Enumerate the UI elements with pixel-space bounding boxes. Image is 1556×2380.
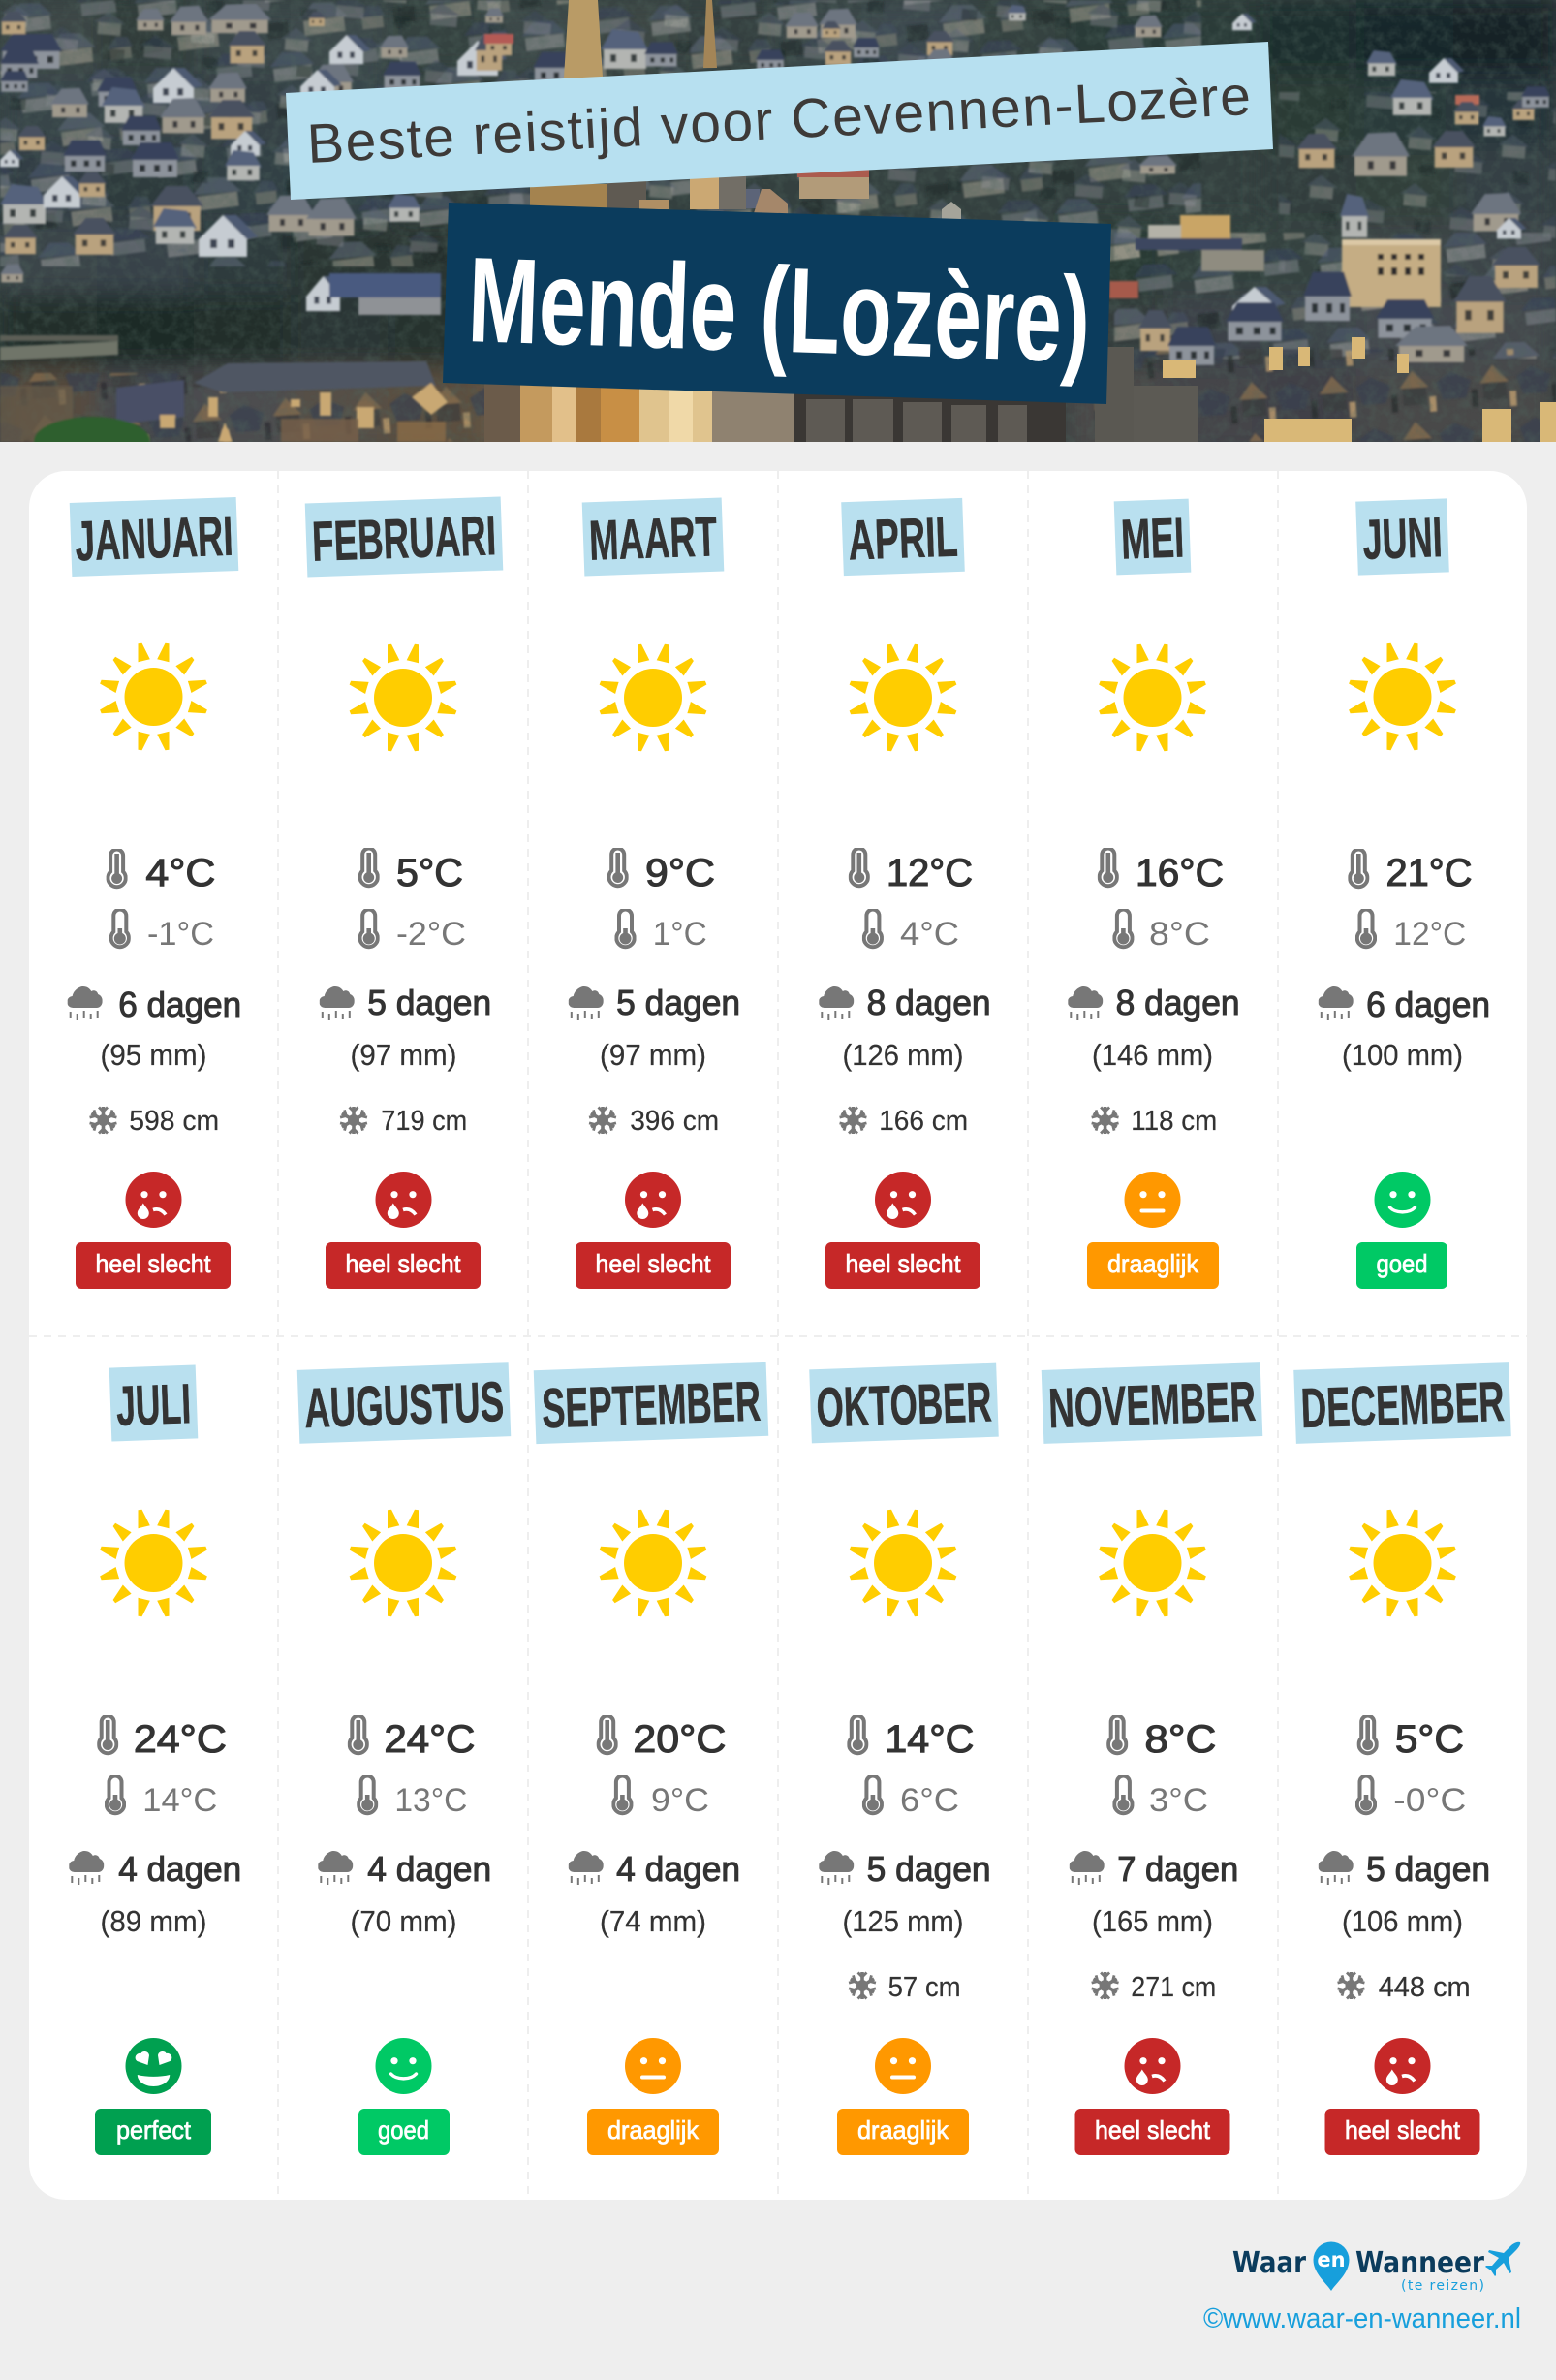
rating face (1124, 1172, 1180, 1228)
rating badge (587, 2109, 719, 2155)
icon: airplane (1485, 2242, 1520, 2276)
rain days: 4 dagen (367, 1849, 491, 1889)
high temperature (849, 1715, 974, 1761)
rating badge (76, 1242, 231, 1289)
low temperature (864, 909, 959, 953)
low temperature: 1°C (653, 916, 707, 953)
panel: april (819, 498, 991, 1289)
month label (582, 498, 724, 576)
month label: SEPTEMBER (541, 1370, 762, 1440)
rating badge (1087, 1242, 1219, 1289)
low temperature: 6°C (900, 1782, 959, 1819)
rating badge (825, 1242, 980, 1289)
panel: mei (1068, 499, 1240, 1289)
snow: 57 cm (888, 1972, 961, 2003)
rain days: 6 dagen (118, 985, 241, 1024)
precipitation: (165 mm) (1092, 1904, 1213, 1938)
low temperature (107, 1775, 217, 1819)
rating badge: heel slecht (345, 1249, 461, 1278)
panel: juli (69, 1364, 241, 2155)
high temperature: 5°C (1395, 1718, 1464, 1761)
rating badge: goed (378, 2115, 429, 2145)
high temperature: 24°C (384, 1718, 475, 1761)
rating badge: draaglijk (857, 2115, 949, 2145)
month label (109, 1364, 198, 1442)
snow: 271 cm (1131, 1972, 1216, 2003)
rating badge (95, 2109, 211, 2155)
rain days (1069, 1849, 1238, 1889)
snow (340, 1106, 467, 1137)
low temperature (613, 1775, 709, 1819)
precipitation: (126 mm) (843, 1038, 963, 1072)
panel: augustus (297, 1362, 511, 2155)
rating face (376, 1172, 432, 1228)
rating badge: heel slecht (95, 1249, 211, 1278)
rating badge: draaglijk (1107, 1249, 1199, 1278)
icon: sun (1099, 644, 1206, 751)
rain days: 4 dagen (118, 1849, 241, 1889)
rating badge: heel slecht (845, 1249, 961, 1278)
title banner (286, 42, 1273, 200)
low temperature: 12°C (1393, 916, 1466, 953)
icon: sun (849, 1510, 957, 1616)
high temperature: 24°C (134, 1718, 227, 1761)
rain days: 4 dagen (616, 1849, 740, 1889)
panel: december (1293, 1362, 1511, 2155)
high temperature (350, 1715, 475, 1761)
high temperature: 20°C (633, 1718, 726, 1761)
rating face (1124, 2038, 1180, 2094)
low temperature: 4°C (900, 916, 959, 953)
rating face (126, 1172, 182, 1228)
low temperature (360, 909, 466, 953)
low temperature (1114, 1775, 1208, 1819)
panel: maart (568, 498, 740, 1289)
logo: Waar en Wanneer: Wanneer (1355, 2246, 1484, 2280)
snow: 396 cm (630, 1106, 719, 1137)
rain days: 6 dagen (1366, 985, 1490, 1024)
precipitation: (146 mm) (1092, 1038, 1213, 1072)
logo: Waar en Wanneer: (te reizen) (1401, 2278, 1484, 2294)
month label (1114, 499, 1191, 575)
rating badge: heel slecht (1345, 2115, 1461, 2145)
logo: Waar en Wanneer: Waar (1232, 2246, 1306, 2280)
month label (534, 1362, 768, 1444)
month label (1355, 498, 1449, 576)
month label: JUNI (1361, 506, 1444, 572)
precipitation: (95 mm) (101, 1038, 207, 1072)
website url: ©www.waar-en-wanneer.nl (1203, 2303, 1521, 2334)
city banner (443, 203, 1111, 404)
high temperature (599, 1715, 726, 1761)
snow (1091, 1106, 1217, 1137)
month label: FEBRUARI (311, 504, 497, 574)
snow (1091, 1972, 1216, 2003)
rating face (875, 1172, 931, 1228)
snow: 166 cm (879, 1106, 968, 1137)
month label: OKTOBER (815, 1370, 993, 1440)
high temperature (108, 849, 215, 894)
month label (809, 1363, 999, 1443)
rating badge (1356, 1242, 1447, 1289)
rating face (625, 2038, 681, 2094)
low temperature: -0°C (1393, 1782, 1466, 1819)
month label: MEI (1120, 506, 1185, 572)
panel: september (534, 1362, 768, 2155)
month label (305, 496, 503, 578)
month label: AUGUSTUS (303, 1370, 505, 1440)
high temperature: 9°C (645, 852, 715, 894)
high temperature (1100, 849, 1224, 894)
snow: 448 cm (1379, 1972, 1471, 2003)
icon: sun (100, 1510, 207, 1616)
low temperature: 3°C (1149, 1782, 1208, 1819)
low temperature: -2°C (396, 916, 466, 953)
icon: sun (349, 1510, 457, 1616)
rain days: 5 dagen (1366, 1849, 1490, 1889)
precipitation: (125 mm) (843, 1904, 963, 1938)
high temperature (1350, 849, 1473, 894)
low temperature (358, 1775, 467, 1819)
panel: februari (305, 496, 503, 1289)
precipitation: (70 mm) (351, 1904, 457, 1938)
month label: NOVEMBER (1047, 1370, 1257, 1440)
precipitation: (74 mm) (600, 1904, 706, 1938)
rain days (67, 985, 241, 1024)
city banner: Mende (Lozère) (466, 233, 1092, 388)
icon: sun (349, 644, 457, 751)
rating face (1374, 1172, 1430, 1228)
rating badge: draaglijk (607, 2115, 700, 2145)
icon: location pin (1314, 2242, 1349, 2291)
calendar card (29, 471, 1527, 2200)
rain days (69, 1849, 241, 1889)
icon: sun (1349, 643, 1456, 750)
low temperature: 14°C (142, 1782, 217, 1819)
rating badge (358, 2109, 450, 2155)
month label (841, 498, 965, 576)
low temperature: 9°C (651, 1782, 709, 1819)
rating badge (576, 1242, 731, 1289)
icon: location pin: en (1317, 2248, 1346, 2271)
rating badge (837, 2109, 969, 2155)
high temperature: 4°C (145, 852, 215, 894)
panel: oktober (809, 1363, 999, 2155)
low temperature: -1°C (147, 916, 214, 953)
icon: sun (1349, 1510, 1456, 1616)
low temperature (616, 909, 707, 953)
high temperature (1108, 1715, 1216, 1761)
high temperature (99, 1715, 227, 1761)
rain days: 8 dagen (1116, 983, 1240, 1022)
icon: sun (1099, 1510, 1206, 1616)
rating badge: goed (1376, 1249, 1428, 1278)
month label (297, 1362, 511, 1444)
low temperature (864, 1775, 959, 1819)
high temperature (608, 849, 715, 894)
hero photo of Mende (0, 0, 1556, 465)
rating badge (1075, 2109, 1230, 2155)
month label (70, 497, 238, 577)
rain days: 8 dagen (867, 983, 991, 1022)
high temperature: 12°C (887, 852, 973, 894)
snow (849, 1972, 961, 2003)
rain days: 5 dagen (367, 983, 491, 1022)
rating face (625, 1172, 681, 1228)
rating badge (1325, 2109, 1480, 2155)
panel: januari (67, 497, 241, 1289)
rating badge: heel slecht (1095, 2115, 1211, 2145)
high temperature: 5°C (396, 852, 463, 894)
low temperature (1357, 1775, 1466, 1819)
low temperature (111, 909, 214, 953)
precipitation: (100 mm) (1342, 1038, 1463, 1072)
high temperature: 14°C (885, 1718, 974, 1761)
snow: 598 cm (129, 1106, 219, 1137)
low temperature: 8°C (1149, 916, 1210, 953)
icon: sun (100, 643, 207, 750)
low temperature (1357, 909, 1466, 953)
snow: 719 cm (381, 1106, 467, 1137)
month label: MAART (588, 505, 718, 573)
rain days: 7 dagen (1117, 1849, 1238, 1889)
snow (1337, 1972, 1471, 2003)
month label: JULI (115, 1372, 192, 1438)
panel: november (1042, 1362, 1262, 2155)
rating face (875, 2038, 931, 2094)
snow (839, 1106, 968, 1137)
title banner: Beste reistijd voor Cevennen-Lozère (305, 65, 1252, 175)
rating badge: perfect (116, 2115, 192, 2145)
precipitation: (97 mm) (600, 1038, 706, 1072)
icon: sun (599, 644, 707, 751)
high temperature: 21°C (1385, 852, 1473, 894)
precipitation: (89 mm) (101, 1904, 207, 1938)
month label (1042, 1362, 1262, 1444)
panel: juni (1318, 498, 1490, 1289)
high temperature: 8°C (1144, 1718, 1216, 1761)
icon: sun (599, 1510, 707, 1616)
rating face (376, 2038, 432, 2094)
icon: sun (849, 644, 957, 751)
high temperature (851, 849, 973, 894)
precipitation: (106 mm) (1342, 1904, 1463, 1938)
high temperature (1358, 1715, 1464, 1761)
high temperature: 16°C (1136, 852, 1224, 894)
month label: APRIL (847, 506, 959, 572)
rain days: 5 dagen (616, 983, 740, 1022)
logo: Waar en Wanneer (1232, 2242, 1520, 2294)
rating badge (326, 1242, 481, 1289)
rating face (1374, 2038, 1430, 2094)
month label: JANUARI (74, 505, 234, 573)
snow: 118 cm (1131, 1106, 1217, 1137)
low temperature (1114, 909, 1210, 953)
rain days: 5 dagen (867, 1849, 991, 1889)
high temperature (360, 849, 463, 894)
low temperature: 13°C (394, 1782, 467, 1819)
precipitation: (97 mm) (351, 1038, 457, 1072)
snow (89, 1106, 219, 1137)
snow (589, 1106, 719, 1137)
rating face (126, 2038, 182, 2094)
rating badge: heel slecht (595, 1249, 711, 1278)
